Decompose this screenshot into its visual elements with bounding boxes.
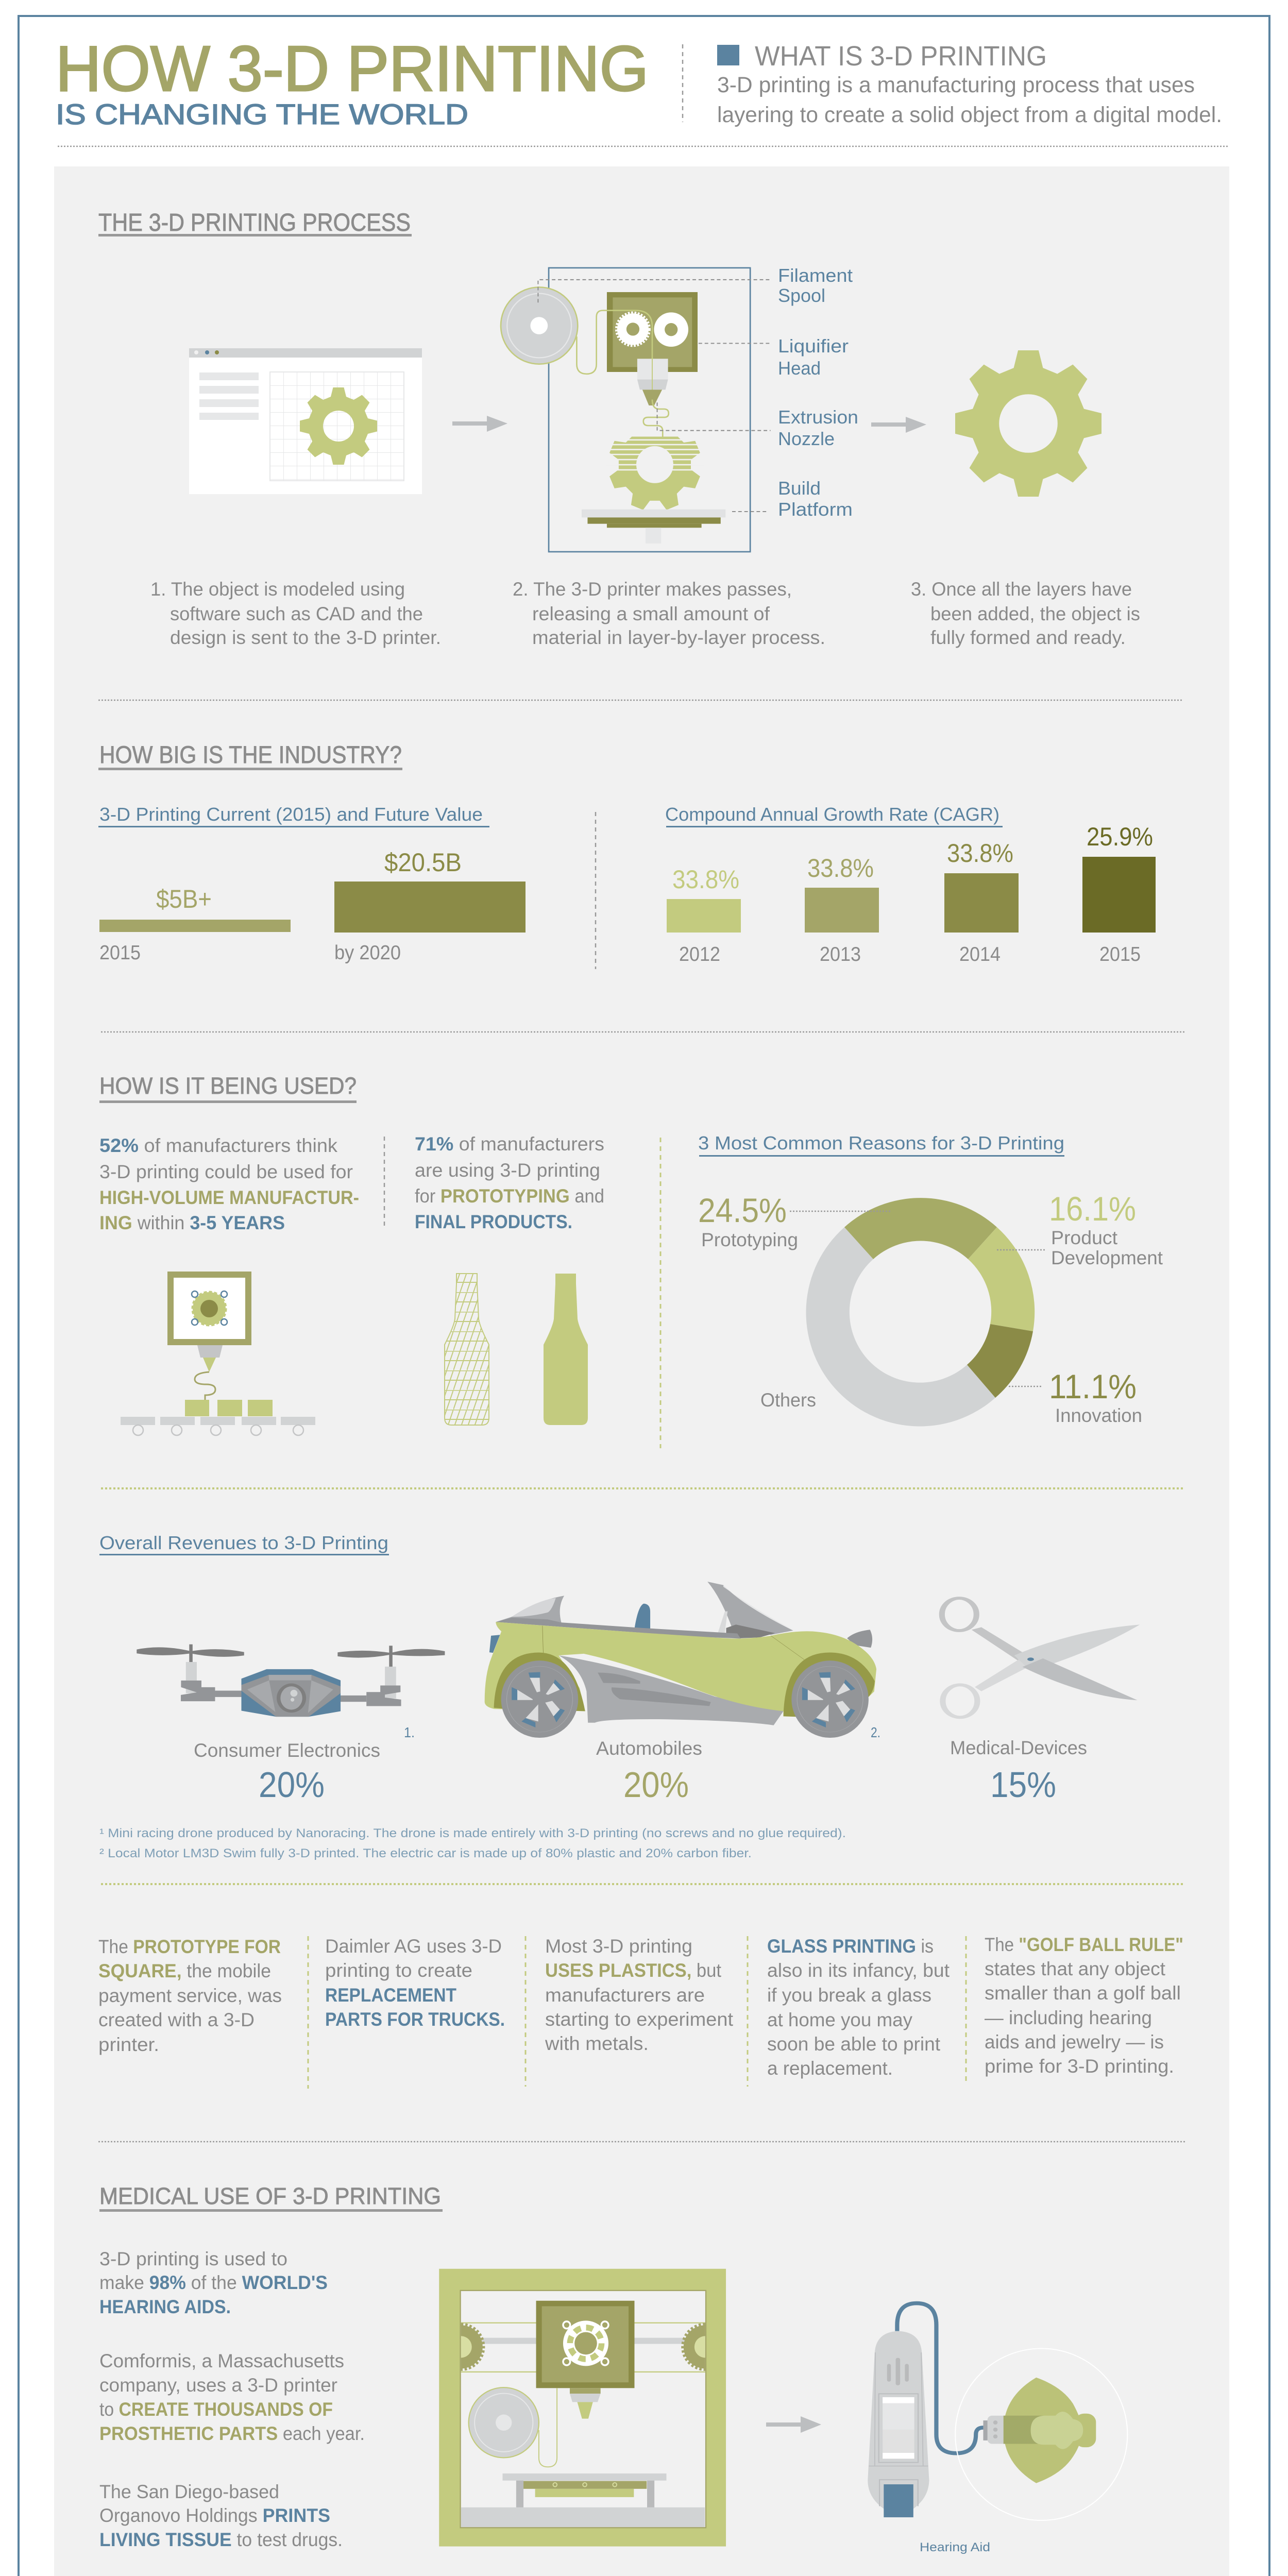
printer part labels bbox=[778, 265, 858, 520]
fact: glass printing: if you break a glass bbox=[767, 1985, 931, 2006]
arrow bbox=[871, 417, 926, 433]
icon: wireframe bottle bbox=[445, 1274, 489, 1425]
heading: usage: HOW IS IT BEING USED? bbox=[99, 1073, 357, 1099]
text: 52% of manufacturers: 52% of manufacturers think bbox=[99, 1135, 338, 1156]
fact: daimler: PARTS FOR TRUCKS. bbox=[325, 2009, 505, 2030]
icon: scissors bbox=[942, 1598, 1140, 1717]
text: hearing aids: make 98% of the WORLD'S bbox=[99, 2272, 328, 2293]
icon: partially printed gear bbox=[609, 437, 700, 510]
fact: prototype for square: payment service, was bbox=[98, 1985, 282, 2006]
step captions: software such as CAD and the bbox=[170, 603, 423, 624]
printer part labels: Extrusion bbox=[778, 406, 858, 428]
step captions bbox=[150, 579, 1140, 648]
revenue labels bbox=[194, 1724, 1087, 1805]
heading: overall revenues: Overall Revenues to 3-D Printing bbox=[99, 1532, 388, 1553]
section: the 3-D printing process bbox=[98, 209, 1183, 700]
fact: plastics: starting to experiment bbox=[545, 2009, 734, 2030]
chart: current and future value bbox=[98, 804, 526, 964]
fact: glass printing: GLASS PRINTING is bbox=[767, 1936, 934, 1957]
chart: reasons donut: 24.5% bbox=[698, 1191, 787, 1229]
arrow bbox=[766, 2416, 821, 2433]
illustration: medical 3-D printer bbox=[439, 2269, 726, 2547]
fact: daimler: Daimler AG uses 3-D bbox=[325, 1936, 502, 1957]
icon: liquifier head bbox=[607, 292, 698, 372]
chart: reasons donut: Product bbox=[1051, 1227, 1118, 1248]
step captions: releasing a small amount of bbox=[532, 603, 770, 624]
fact: glass printing: soon be able to print bbox=[767, 2033, 941, 2055]
icon: finished gear bbox=[955, 350, 1101, 497]
illustration: 3-D printer bbox=[501, 268, 771, 552]
text: hearing aids: 3-D printing is used to bbox=[99, 2248, 287, 2269]
chart: CAGR: Compound Annual Growth Rate (CAGR) bbox=[665, 804, 999, 825]
revenue labels: Medical-Devices bbox=[950, 1737, 1087, 1758]
text: 71% of manufacturers: are using 3-D printing bbox=[415, 1160, 600, 1181]
chart: current and future value: 2015 bbox=[99, 942, 141, 964]
title: IS CHANGING THE WORLD bbox=[56, 98, 468, 130]
fact: golf ball rule bbox=[985, 1934, 1183, 2077]
illustration: hearing aid: Hearing Aid bbox=[920, 2540, 990, 2554]
section: medical use bbox=[98, 2183, 1183, 2576]
printer part labels: Head bbox=[778, 358, 821, 379]
chart: CAGR bbox=[665, 804, 1156, 965]
fact: daimler: REPLACEMENT bbox=[325, 1985, 456, 2006]
chart: reasons donut: Others bbox=[760, 1389, 816, 1411]
text: 52% of manufacturers: 3-D printing could be used for bbox=[99, 1161, 353, 1182]
heading: industry: HOW BIG IS THE INDUSTRY? bbox=[99, 741, 402, 768]
chart: current and future value: $5B+ bbox=[156, 885, 212, 913]
fact: prototype for square: SQUARE, the mobile bbox=[98, 1960, 271, 1981]
fact: plastics: Most 3-D printing bbox=[545, 1936, 692, 1957]
revenue labels: 20% bbox=[623, 1765, 689, 1805]
footnotes: ² Local Motor LM3D Swim fully 3-D printed. The electric car is made up of 80% plastic and 20% carbon fiber. bbox=[99, 1846, 752, 1860]
chart: reasons donut: 16.1% bbox=[1049, 1190, 1136, 1228]
revenue labels: 1. bbox=[404, 1724, 415, 1740]
fact: plastics: with metals. bbox=[545, 2033, 649, 2054]
text: comformis: Comformis, a Massachusetts bbox=[99, 2350, 344, 2371]
icon: build platform bbox=[582, 510, 725, 544]
step captions: material in layer-by-layer process. bbox=[532, 627, 825, 648]
fact: plastics: manufacturers are bbox=[545, 1985, 705, 2006]
text: organovo: The San Diego-based bbox=[99, 2481, 279, 2502]
fact: golf ball rule: The "GOLF BALL RULE" bbox=[985, 1934, 1183, 1955]
fact: golf ball rule: smaller than a golf ball bbox=[985, 1982, 1181, 2004]
chart: current and future value: 3-D Printing Current (2015) and Future Value bbox=[99, 804, 483, 825]
fact: prototype for square: printer. bbox=[98, 2034, 159, 2055]
fact: daimler: printing to create bbox=[325, 1960, 472, 1981]
fact: plastics bbox=[545, 1936, 734, 2054]
printer part labels: Filament bbox=[778, 265, 853, 286]
section: five facts bbox=[98, 1934, 1186, 2142]
text: comformis bbox=[99, 2350, 365, 2444]
what is 3-D printing block: 3-D printing is a manufacturing process that uses bbox=[717, 73, 1195, 97]
chart: CAGR: 2015 bbox=[1099, 943, 1141, 965]
chart: current and future value: $20.5B bbox=[384, 848, 462, 877]
chart: CAGR: 2014 bbox=[959, 943, 1001, 965]
fact: glass printing: at home you may bbox=[767, 2009, 912, 2030]
printer part labels: Platform bbox=[778, 499, 853, 520]
header bbox=[56, 33, 1228, 146]
icon: drone bbox=[137, 1645, 445, 1717]
title: HOW 3-D PRINTING bbox=[56, 33, 649, 105]
heading: medical: MEDICAL USE OF 3-D PRINTING bbox=[99, 2183, 441, 2209]
fact: daimler bbox=[325, 1936, 505, 2030]
chart: reasons donut: Prototyping bbox=[701, 1229, 798, 1250]
revenue labels: 20% bbox=[259, 1765, 325, 1805]
chart: reasons donut: Development bbox=[1051, 1247, 1163, 1268]
fact: golf ball rule: aids and jewelry — is bbox=[985, 2031, 1164, 2053]
printer part labels: Nozzle bbox=[778, 428, 835, 449]
chart: CAGR: 33.8% bbox=[947, 839, 1013, 868]
illustration: hearing aid bbox=[868, 2303, 1127, 2554]
text: 71% of manufacturers: FINAL PRODUCTS. bbox=[415, 1211, 572, 1232]
what is 3-D printing block bbox=[717, 41, 1222, 127]
chart: CAGR: 33.8% bbox=[807, 854, 874, 883]
step captions: 1. The object is modeled using bbox=[150, 579, 405, 600]
text: 71% of manufacturers: for PROTOTYPING and bbox=[415, 1185, 604, 1207]
section: how big is the industry bbox=[98, 741, 1186, 1032]
text: organovo: LIVING TISSUE to test drugs. bbox=[99, 2529, 343, 2550]
text: comformis: PROSTHETIC PARTS each year. bbox=[99, 2423, 365, 2444]
chart: reasons donut bbox=[698, 1132, 1163, 1427]
fact: golf ball rule: prime for 3-D printing. bbox=[985, 2056, 1174, 2077]
footnotes: ¹ Mini racing drone produced by Nanoracing. The drone is made entirely with 3-D printing (no screws and no glue required). bbox=[99, 1826, 846, 1840]
step captions: been added, the object is bbox=[930, 603, 1140, 624]
step captions: design is sent to the 3-D printer. bbox=[170, 627, 441, 648]
section: how is it being used bbox=[99, 1073, 1185, 1488]
revenue labels: Automobiles bbox=[596, 1738, 702, 1759]
revenue labels: Consumer Electronics bbox=[194, 1740, 380, 1761]
illustration: high-volume production line bbox=[121, 1275, 315, 1435]
step captions: fully formed and ready. bbox=[930, 627, 1126, 648]
arrow bbox=[452, 416, 507, 432]
footnotes bbox=[99, 1826, 846, 1860]
fact: prototype for square: The PROTOTYPE FOR bbox=[98, 1936, 281, 1957]
chart: CAGR: 2012 bbox=[679, 943, 720, 965]
chart: CAGR: 25.9% bbox=[1087, 822, 1153, 851]
text: hearing aids bbox=[99, 2248, 328, 2317]
text: 52% of manufacturers: HIGH-VOLUME MANUFACTUR- bbox=[99, 1187, 359, 1208]
text: 71% of manufacturers bbox=[415, 1133, 604, 1232]
text: comformis: to CREATE THOUSANDS OF bbox=[99, 2399, 333, 2420]
text: 52% of manufacturers: ING within 3-5 YEARS bbox=[99, 1212, 285, 1233]
heading: process: THE 3-D PRINTING PROCESS bbox=[98, 209, 411, 236]
fact: glass printing: a replacement. bbox=[767, 2058, 893, 2079]
fact: glass printing: also in its infancy, but bbox=[767, 1960, 950, 1981]
icon: extrusion nozzle bbox=[637, 359, 669, 437]
step captions: 2. The 3-D printer makes passes, bbox=[513, 579, 792, 600]
icon: 3-D printed car bbox=[485, 1582, 876, 1738]
icon: blue square bbox=[717, 45, 739, 65]
printer part labels: Spool bbox=[778, 285, 825, 306]
section: overall revenues bbox=[99, 1532, 1185, 1884]
fact: glass printing bbox=[767, 1936, 950, 2079]
fact: plastics: USES PLASTICS, but bbox=[545, 1960, 722, 1981]
chart: current and future value: by 2020 bbox=[334, 942, 401, 964]
chart: reasons donut: 3 Most Common Reasons for 3-D Printing bbox=[698, 1132, 1064, 1154]
chart: reasons donut: Innovation bbox=[1055, 1405, 1142, 1426]
revenue labels: 15% bbox=[990, 1765, 1056, 1805]
what is 3-D printing block: WHAT IS 3-D PRINTING bbox=[755, 41, 1047, 72]
chart: CAGR: 2013 bbox=[820, 943, 861, 965]
text: comformis: company, uses a 3-D printer bbox=[99, 2375, 337, 2396]
text: organovo bbox=[99, 2481, 343, 2550]
step captions: 3. Once all the layers have bbox=[911, 579, 1132, 600]
fact: golf ball rule: states that any object bbox=[985, 1958, 1166, 1979]
icon: filament spool bbox=[501, 287, 578, 364]
chart: reasons donut: 11.1% bbox=[1049, 1367, 1137, 1405]
what is 3-D printing block: layering to create a solid object from a digital model. bbox=[717, 103, 1222, 127]
printer part labels: Liquifier bbox=[778, 335, 849, 357]
chart: CAGR: 33.8% bbox=[672, 865, 739, 894]
text: 71% of manufacturers: 71% of manufacturers bbox=[415, 1133, 604, 1155]
revenue labels: 2. bbox=[871, 1724, 880, 1740]
fact: prototype for square bbox=[98, 1936, 282, 2055]
text: 52% of manufacturers bbox=[99, 1135, 359, 1233]
text: hearing aids: HEARING AIDS. bbox=[99, 2296, 231, 2317]
fact: prototype for square: created with a 3-D bbox=[98, 2009, 255, 2030]
fact: golf ball rule: — including hearing bbox=[985, 2007, 1152, 2028]
printer part labels: Build bbox=[778, 478, 821, 499]
icon: solid bottle bbox=[544, 1274, 588, 1425]
text: organovo: Organovo Holdings PRINTS bbox=[99, 2505, 330, 2526]
illustration: CAD software window bbox=[189, 348, 422, 494]
